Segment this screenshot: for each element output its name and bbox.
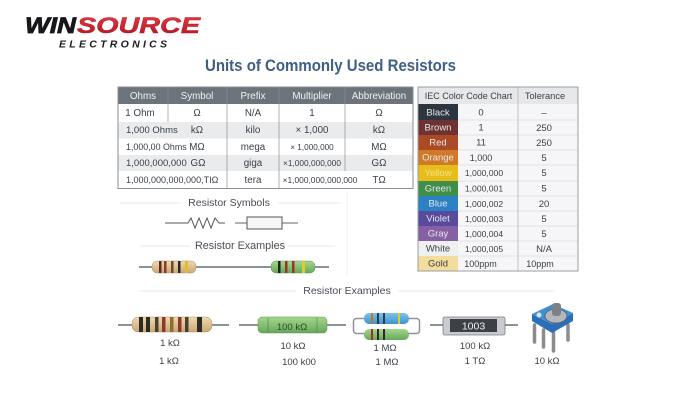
example: 100 kΩ green resistor: 10 kΩ [280, 341, 306, 352]
heading: resistor symbols: Resistor Symbols [188, 197, 270, 209]
color swatches: Red [429, 138, 447, 148]
table: IEC color code: 1,000,000 [465, 168, 503, 178]
table: IEC color code: 1,000 [470, 153, 492, 163]
table header [418, 87, 578, 104]
table: units: mega [241, 142, 266, 153]
table header: Abbreviation [352, 91, 406, 102]
example: 1 kΩ resistor: 1 kΩ [160, 338, 180, 349]
example: potentiometer: 10 kΩ [534, 356, 560, 367]
table: units: GΩ [372, 158, 386, 169]
table: units: × 1,000,000 [290, 143, 334, 152]
example: dual resistors loop: 1 MΩ [374, 343, 396, 354]
table: IEC color code: 0 [478, 108, 484, 118]
color swatches [418, 104, 458, 271]
example: 1003 SMD resistor [430, 317, 518, 367]
table: units: 1 Ohm [125, 108, 155, 119]
table: IEC color code: 1,000,001 [465, 184, 503, 194]
table header: Prefix [240, 91, 266, 102]
table: units: ×1,000,000,000,000 [283, 175, 358, 185]
color swatches: Violet [426, 214, 450, 224]
table: IEC color code: 250 [536, 138, 552, 149]
table: IEC color code: 11 [476, 138, 486, 148]
table: units: 1,000 Ohms [126, 125, 178, 136]
table: IEC color code: – [541, 108, 547, 118]
table: units: N/A [245, 108, 262, 119]
title: Units of Commonly Used Resistors [205, 56, 456, 75]
table: IEC color code: 1,000,004 [465, 229, 503, 239]
icon: green resistor [271, 261, 315, 273]
color swatches: White [426, 244, 450, 254]
icon: tan resistor [152, 261, 196, 273]
table header: IEC Color Code Chart [425, 91, 513, 101]
table: IEC color code: 5 [541, 229, 547, 240]
table: IEC color code: 1,000,005 [465, 244, 503, 254]
color swatches: Blue [428, 198, 448, 210]
table: units: ×1,000,000,000 [283, 158, 341, 168]
table header: Multiplier [292, 91, 332, 102]
example: 1 kΩ resistor: 1 kΩ [159, 356, 179, 367]
table: IEC color code: 1,000,002 [465, 199, 503, 209]
table: units: MΩ [189, 142, 205, 153]
example: 100 kΩ green resistor: 100 kΩ [277, 322, 307, 333]
table: units: kΩ [373, 125, 385, 136]
example: potentiometer [532, 303, 573, 367]
table header: Tolerance [525, 91, 565, 101]
table: units: × 1,000 [296, 125, 329, 136]
table header: Symbol [181, 91, 213, 102]
table: IEC color code: 100ppm [464, 259, 497, 269]
table header: Ohms [130, 91, 156, 102]
example: 100 kΩ green resistor: 100 k00 [282, 357, 316, 368]
heading: resistor examples large: Resistor Examples [303, 285, 391, 297]
table: units: 1 [309, 108, 315, 119]
table: units: 1,000,000,000 [126, 158, 187, 169]
heading: resistor examples small: Resistor Examples [195, 240, 286, 252]
table: units: TΩ [372, 175, 386, 186]
table: IEC color code: 250 [536, 123, 552, 134]
icon: zigzag resistor symbol [165, 218, 225, 228]
table: units: giga [244, 158, 263, 169]
example: 1003 SMD resistor: 100 kΩ [460, 341, 490, 352]
table: units: 1,000,000,000,000,TIΩ [126, 175, 219, 185]
table: units: kilo [246, 125, 261, 136]
table: units: 1,000,00 Ohms [126, 142, 187, 152]
logo: WIN [25, 13, 77, 38]
table: IEC color code: 5 [541, 153, 547, 164]
table: units: tera [245, 175, 262, 186]
table: IEC color code: 20 [539, 199, 549, 210]
table: IEC color code: 5 [541, 184, 547, 194]
table: IEC color code: 1 [478, 122, 484, 134]
table: IEC color code: 10ppm [526, 259, 554, 269]
example: dual resistors loop: 1 MΩ [376, 357, 398, 368]
color swatches: Gold [428, 258, 448, 270]
resistor pair [139, 261, 329, 273]
example: 1003 SMD resistor: 1003 [462, 320, 485, 332]
example: 1003 SMD resistor: 1 TΩ [465, 356, 485, 367]
logo: ELECTRONICS [59, 38, 167, 50]
color swatches: Green [425, 184, 451, 194]
table: IEC color code: 5 [541, 168, 547, 179]
table: units: Ω [375, 108, 383, 119]
table: IEC color code: N/A [536, 244, 553, 255]
table: IEC color code: 5 [541, 214, 547, 225]
example: dual resistors loop [354, 313, 420, 368]
color swatches: Orange [422, 152, 454, 164]
logo [25, 13, 202, 50]
logo: SOURCE [77, 13, 202, 38]
table header [118, 87, 413, 104]
table: IEC color code [418, 87, 578, 271]
color swatches: Yellow [424, 168, 452, 179]
table: IEC color code: 1,000,003 [465, 214, 503, 224]
color swatches: Black [426, 108, 450, 118]
example: 1 kΩ resistor [118, 317, 229, 367]
table: units: GΩ [191, 158, 205, 169]
icon: box resistor symbol [235, 217, 298, 229]
example: 100 kΩ green resistor [239, 317, 346, 368]
table: units: Ω [193, 108, 201, 119]
color swatches: Brown [425, 122, 451, 134]
color swatches: Gray [428, 228, 449, 240]
table: units: kΩ [191, 125, 203, 136]
table: units [118, 87, 413, 189]
table: units: MΩ [371, 142, 387, 153]
